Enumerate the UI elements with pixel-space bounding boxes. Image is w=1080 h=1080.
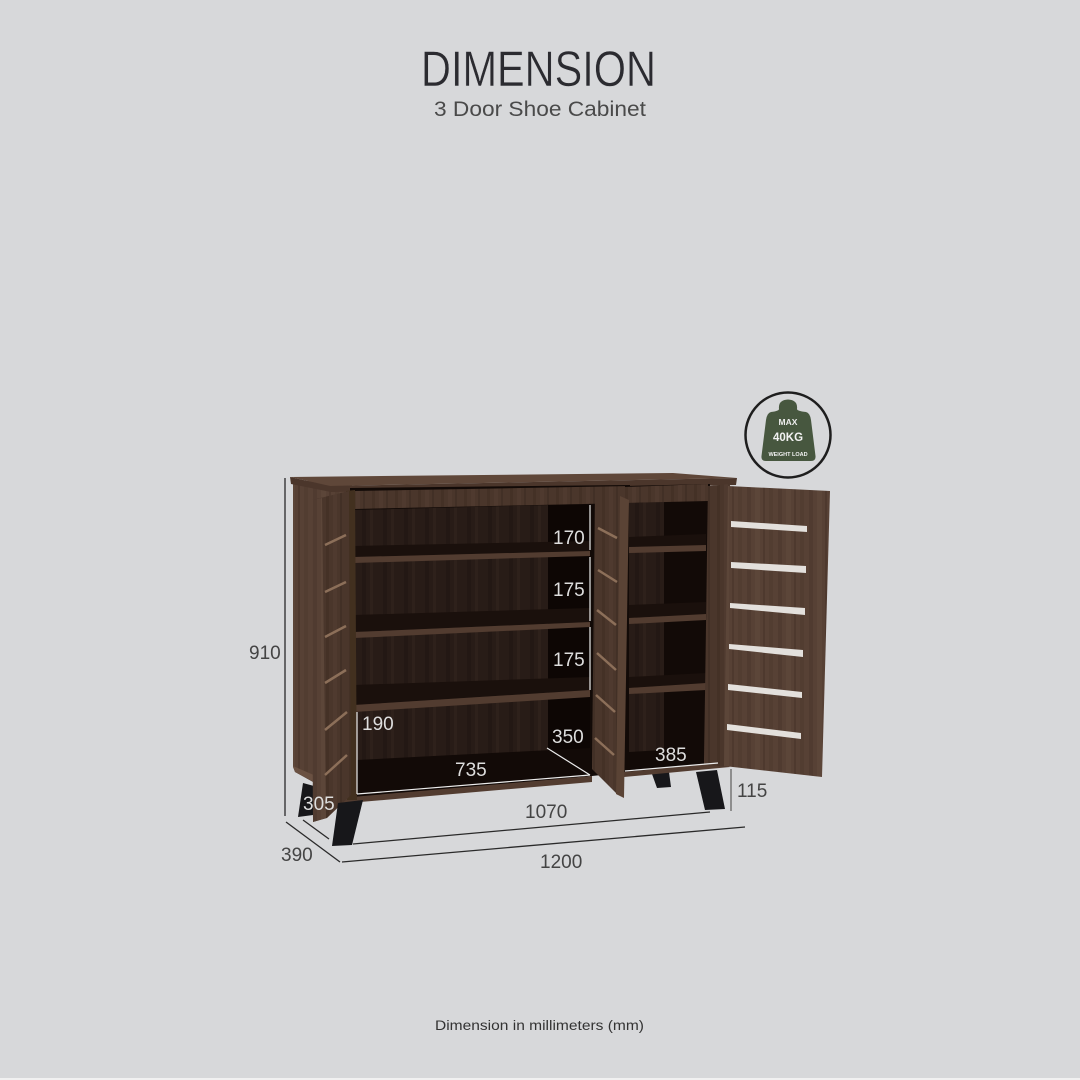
outer dimension labels: 115 (737, 781, 767, 802)
inner dimension labels (303, 528, 687, 815)
inner dimension labels: 305 (303, 794, 335, 815)
bottom edge line (0, 1078, 1080, 1080)
outer dimension labels (249, 643, 767, 873)
left frame post (346, 490, 357, 800)
outer dimension lines (285, 478, 745, 862)
subtitle: 3 Door Shoe Cabinet (434, 98, 646, 121)
outer dimension labels: 910 (249, 643, 281, 664)
inner dimension labels: 385 (655, 745, 687, 766)
left opening interior (350, 485, 630, 800)
outer dimension labels: 390 (281, 845, 313, 866)
right door (724, 486, 830, 777)
icon: max weight load badge: 40KG (773, 432, 803, 444)
inner dimension labels: 170 (553, 528, 585, 549)
cabinet illustration (290, 473, 830, 846)
left side panel (293, 480, 352, 795)
inner dimension labels: 735 (455, 760, 487, 781)
outer dimension labels: 1070 (525, 802, 567, 823)
inner dimension labels: 350 (552, 727, 584, 748)
right opening shelves (629, 534, 706, 694)
title: DIMENSION (421, 41, 656, 97)
base ledge of side panel (293, 766, 316, 783)
icon: max weight load badge (746, 392, 830, 478)
top board (290, 473, 737, 492)
middle door (592, 487, 629, 798)
inner dimension labels: 190 (362, 714, 394, 735)
outer dimension labels: 1200 (540, 852, 582, 873)
left opening shelves (354, 541, 590, 794)
front left leg (332, 800, 363, 846)
left door (312, 491, 351, 822)
bottom rail left (340, 776, 592, 803)
footnote: Dimension in millimeters (mm) (435, 1018, 644, 1033)
back legs (298, 772, 671, 817)
inner dimension labels: 175 (553, 580, 585, 601)
bottom rail right (624, 763, 730, 777)
right opening interior (625, 484, 710, 774)
icon: max weight load badge: WEIGHT LOAD (768, 452, 808, 458)
inner dimension labels: 175 (553, 650, 585, 671)
icon: max weight load badge: MAX (779, 417, 798, 427)
inner dimension lines (357, 505, 718, 794)
right frame post (704, 484, 730, 767)
front right leg (696, 770, 725, 810)
